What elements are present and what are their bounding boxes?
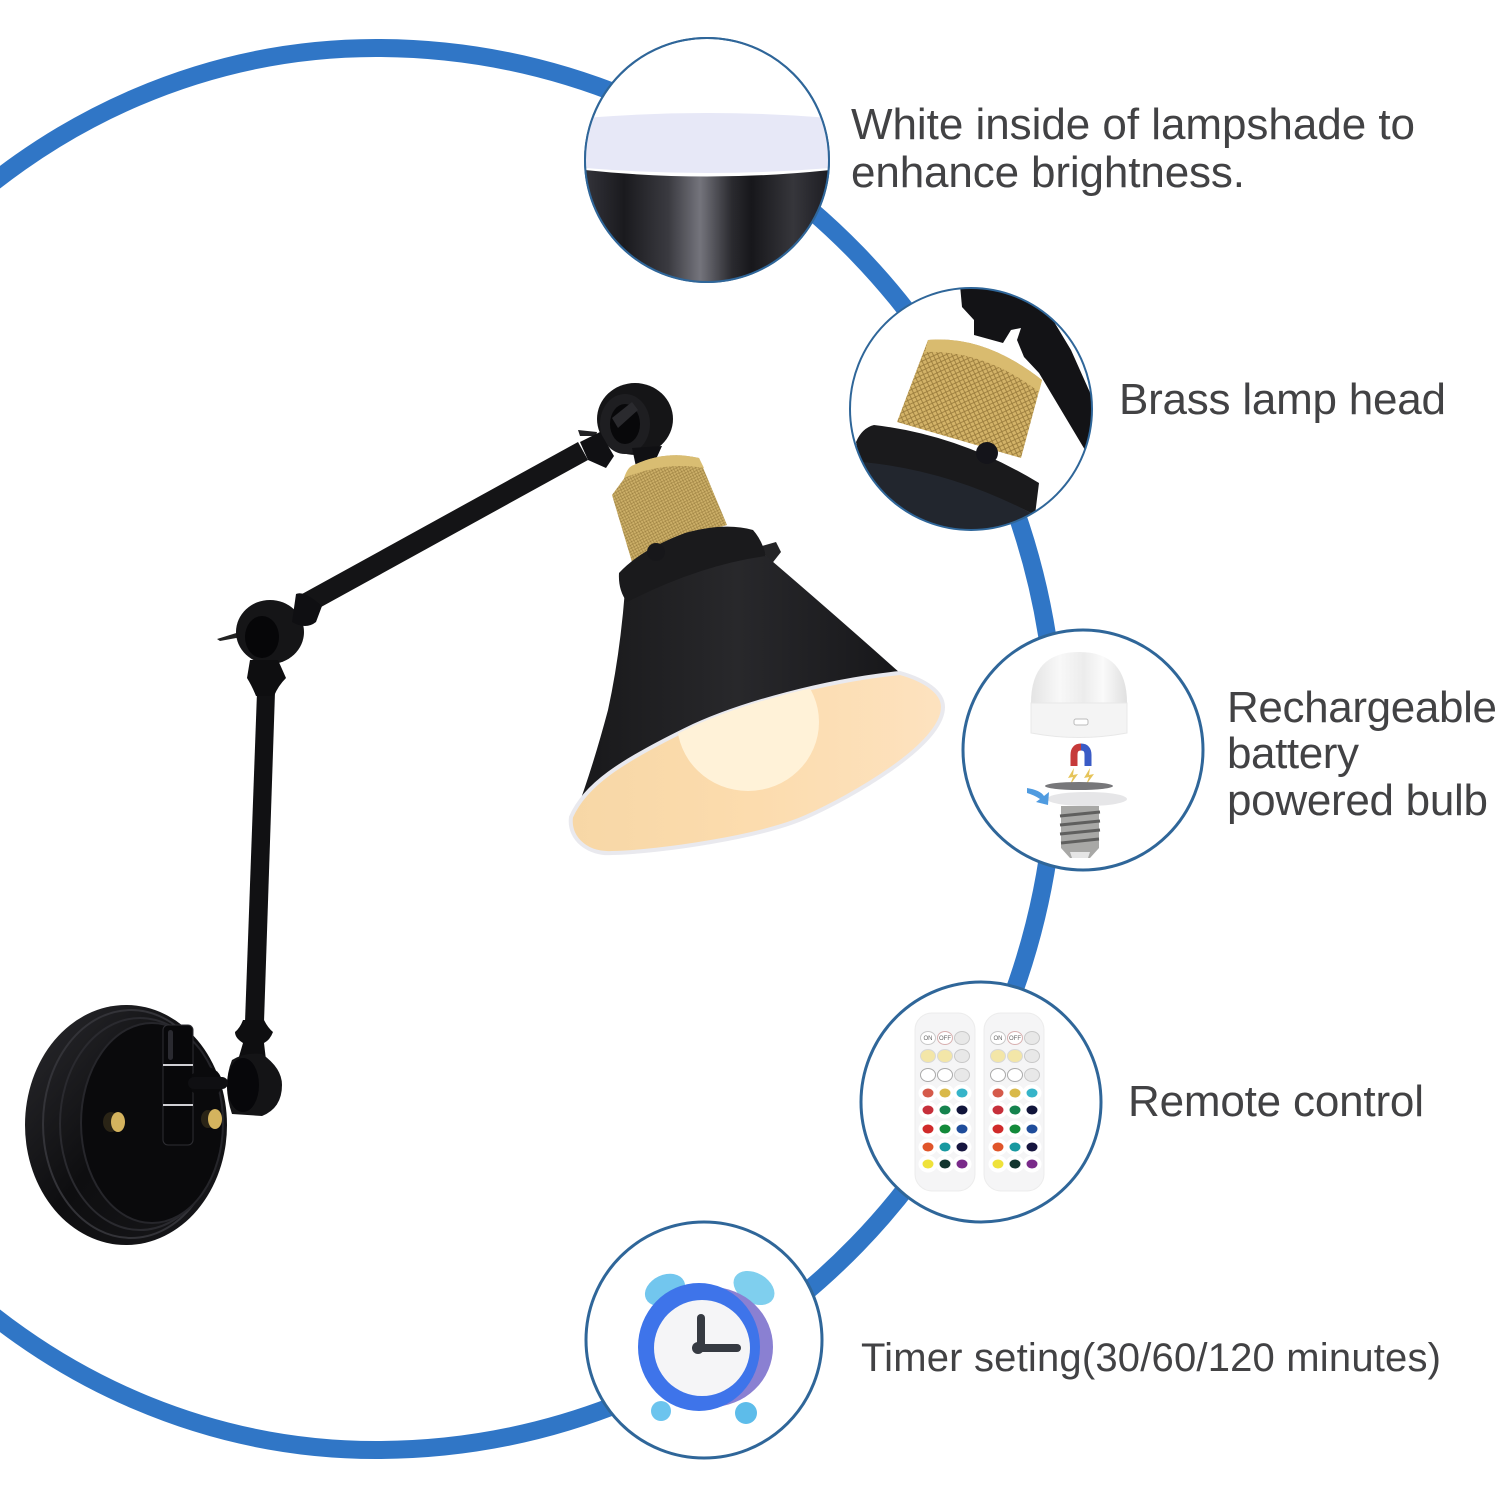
inset white disc (585, 38, 829, 282)
blue connecting arc (0, 48, 1056, 1450)
right foot (735, 1402, 757, 1424)
elbow joint (188, 1054, 282, 1116)
left foot (651, 1401, 671, 1421)
feature 5: timer inset (586, 1222, 822, 1458)
plate inner face (81, 1023, 223, 1223)
label: rechargeable bulb: powered bulb (1227, 776, 1488, 825)
upper arm (302, 442, 588, 612)
inset disc (861, 982, 1101, 1222)
lower arm (245, 692, 275, 1022)
remote right: ON (994, 1036, 1002, 1042)
remote right: OFF (1009, 1036, 1021, 1042)
clock hands (692, 1314, 741, 1354)
inset white disc (850, 288, 1092, 530)
magnetic plate (1045, 782, 1113, 790)
label: white inside of lampshade: enhance brightness. (851, 148, 1245, 197)
inset outline (850, 288, 1092, 530)
bulb base (1031, 703, 1127, 738)
clock face (654, 1300, 750, 1396)
inset photo (856, 285, 1100, 540)
inset outline (585, 38, 829, 282)
plate outer disc (25, 1005, 227, 1245)
bulb (678, 688, 819, 791)
label: timer setting: Timer seting(30/60/120 minutes) (861, 1336, 1441, 1380)
feature 4: remote control inset (861, 982, 1101, 1222)
feature 2: brass head inset (850, 285, 1100, 540)
blue arrow (1027, 788, 1049, 805)
lower finial (235, 1020, 273, 1060)
shade collar (619, 527, 766, 602)
shade body (575, 545, 900, 840)
magnet (1074, 747, 1088, 766)
left bell (640, 1268, 690, 1312)
brass screw right (201, 1109, 222, 1129)
clock ring (638, 1283, 760, 1411)
feature 3: rechargeable bulb inset (963, 630, 1203, 870)
label: white inside of lampshade (851, 100, 1415, 197)
right bell (727, 1264, 781, 1312)
plate ridge rings (43, 1010, 220, 1238)
collar knob (647, 543, 665, 561)
bulb dome (1031, 652, 1127, 703)
shade rear knob (762, 542, 781, 566)
alarm clock icon (638, 1264, 781, 1424)
label: rechargeable bulb (1227, 683, 1497, 825)
bulb switch (1074, 719, 1088, 725)
label: brass lamp head: Brass lamp head (1119, 375, 1446, 424)
remote left (915, 1013, 975, 1191)
brass screw left (103, 1112, 125, 1132)
remote left: OFF (939, 1036, 951, 1042)
screw base (1060, 806, 1100, 858)
sparks (1068, 768, 1094, 785)
inset photo (585, 113, 830, 283)
label: remote control: Remote control (1128, 1077, 1424, 1126)
swivel bracket cylinder (163, 1025, 193, 1145)
wall lamp product (25, 383, 943, 1245)
inset disc (586, 1222, 822, 1458)
wall plate (25, 1005, 227, 1245)
label: white inside of lampshade: White inside of lampshade to (851, 100, 1415, 149)
top joint (578, 383, 673, 476)
brass lamp holder (612, 455, 727, 562)
remote left: ON (924, 1036, 932, 1042)
shade interior (571, 673, 943, 853)
label: rechargeable bulb: Rechargeable (1227, 683, 1497, 732)
socket ring (1047, 792, 1127, 806)
inset disc (963, 630, 1203, 870)
feature 1: lampshade inset (585, 38, 830, 283)
label: rechargeable bulb: battery (1227, 729, 1359, 778)
clock back (649, 1287, 773, 1407)
middle joint (217, 593, 322, 696)
remote right (984, 1013, 1044, 1191)
